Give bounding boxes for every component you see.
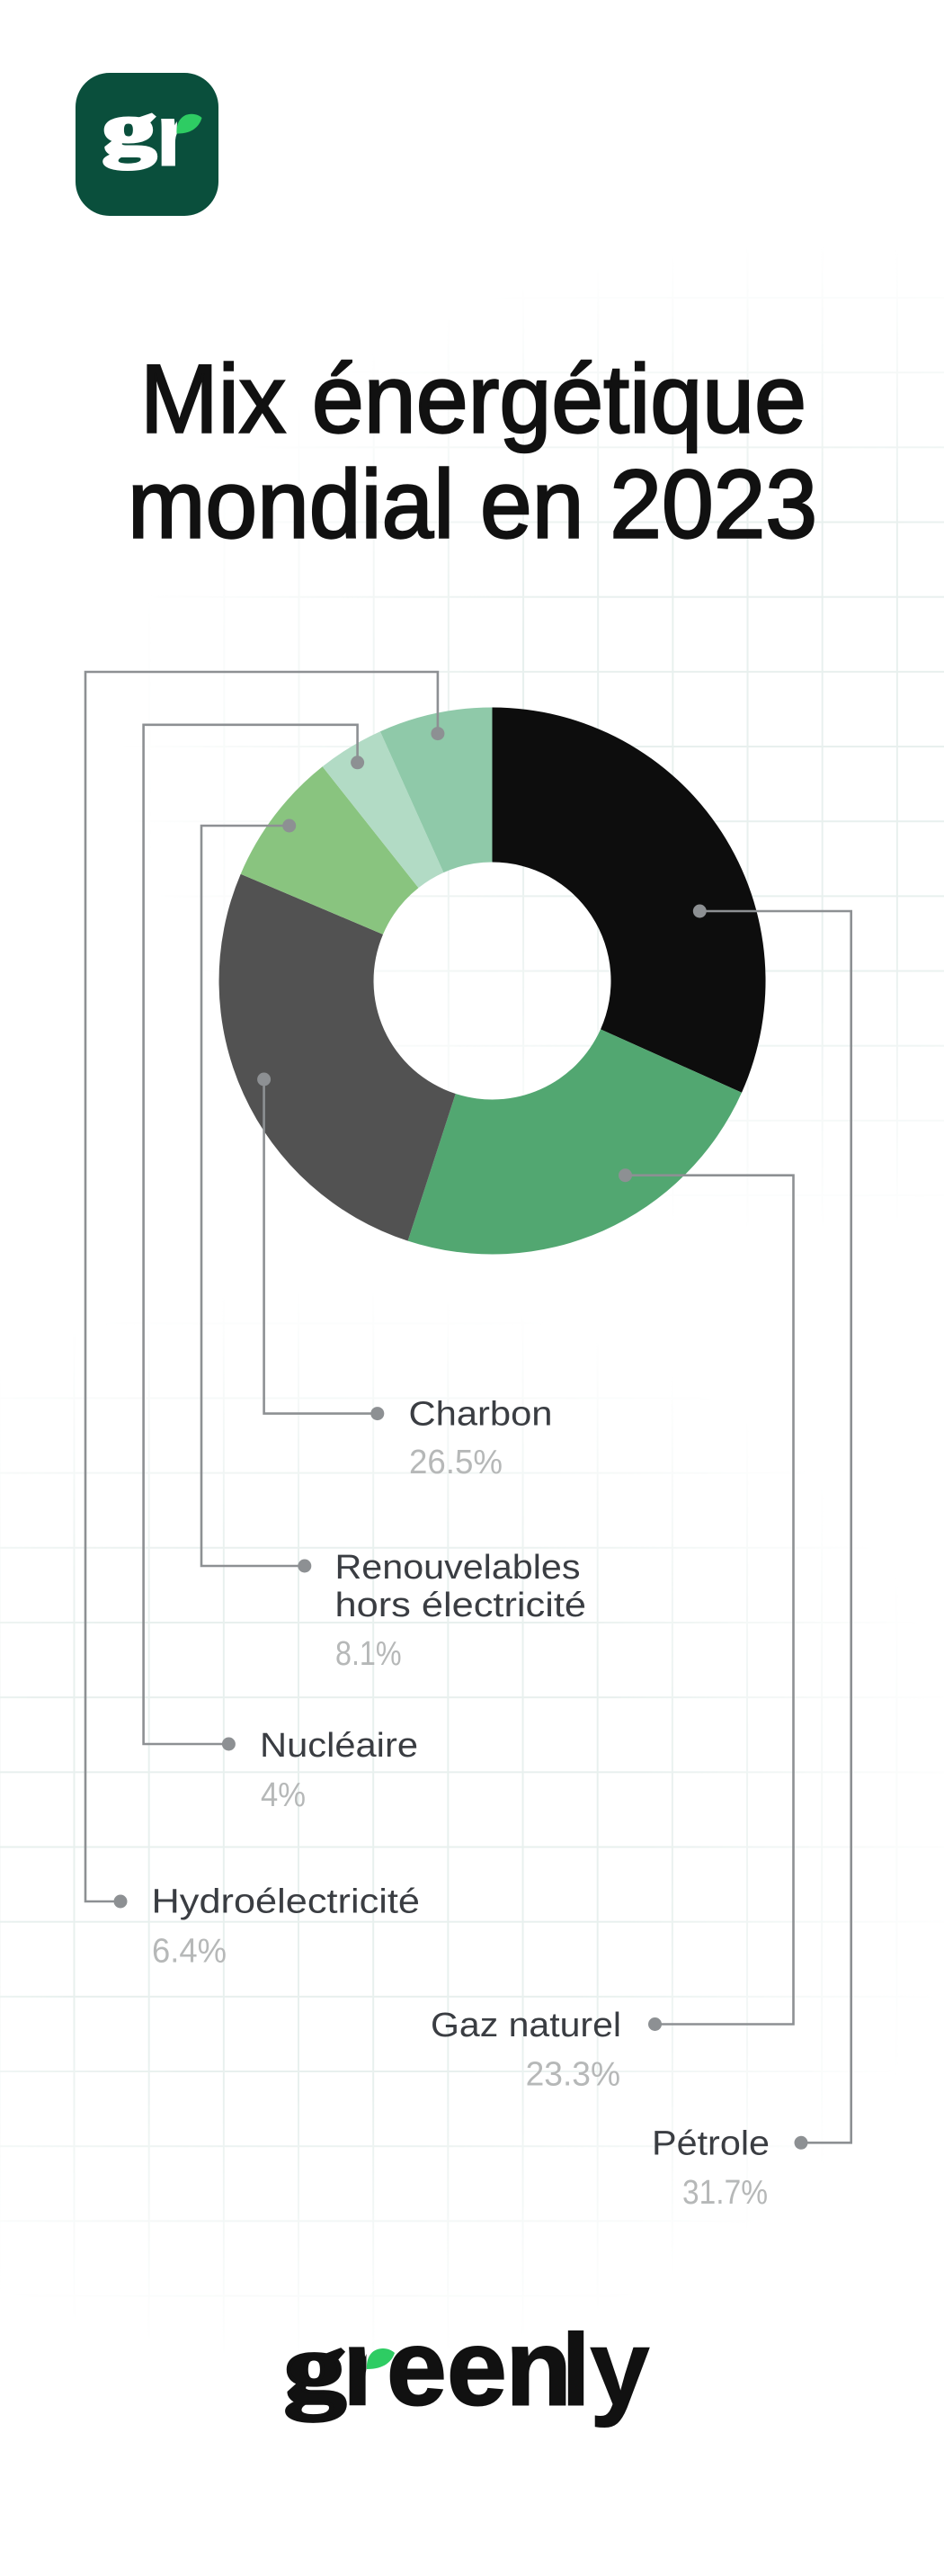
callout: Nucléaire: Nucléaire [260, 1727, 418, 1765]
logo: greenly wordmark [285, 2330, 650, 2428]
callout: Renouvelables hors électricité: hors électricité [334, 1587, 586, 1624]
title: Mix énergétique [140, 344, 806, 453]
logo: greenly wordmark: r [343, 2307, 385, 2428]
callout: Hydroélectricité: Hydroélectricité [151, 1883, 420, 1921]
donut chart [219, 707, 766, 1254]
logo: greenly wordmark: een [387, 2307, 572, 2428]
callout: Renouvelables hors électricité: 8.1% [335, 1635, 402, 1673]
callout: Nucléaire [144, 725, 418, 1814]
slice: Pétrole 31.7% [493, 707, 766, 1093]
slice: Gaz naturel 23.3% [408, 1029, 742, 1254]
callout: Renouvelables hors électricité [201, 818, 586, 1673]
callout: Pétrole: Pétrole [652, 2125, 770, 2163]
icon: greenly app logo: r [156, 87, 190, 183]
slice: Charbon 26.5% [219, 874, 456, 1241]
slice: Nucléaire 4% [323, 731, 443, 888]
callout: Hydroélectricité [85, 672, 444, 1970]
callout: Charbon: Charbon [408, 1396, 552, 1434]
callout: Pétrole [652, 905, 851, 2212]
callout: Pétrole: 31.7% [682, 2174, 768, 2212]
icon: greenly app logo: g [102, 88, 156, 169]
logo: greenly wordmark: g [284, 2313, 346, 2421]
callout: Hydroélectricité: 6.4% [152, 1932, 227, 1970]
callout: Charbon: 26.5% [409, 1444, 503, 1481]
callout: Gaz naturel: Gaz naturel [431, 2007, 621, 2044]
callout: Renouvelables hors électricité: Renouvelables [334, 1549, 581, 1587]
logo: greenly wordmark: l [562, 2313, 590, 2426]
logo: greenly wordmark: y [590, 2307, 650, 2428]
slice: Renouvelables 8.1% [241, 766, 419, 935]
callout: Charbon [257, 1072, 552, 1481]
slice: Hydroélectricité 6.4% [380, 707, 493, 872]
callout: Gaz naturel [431, 1168, 793, 2094]
callout: Nucléaire: 4% [261, 1776, 306, 1814]
title: mondial en 2023 [128, 450, 817, 558]
callout: Gaz naturel: 23.3% [526, 2056, 620, 2094]
title [128, 344, 817, 558]
icon: greenly app logo [76, 73, 218, 216]
